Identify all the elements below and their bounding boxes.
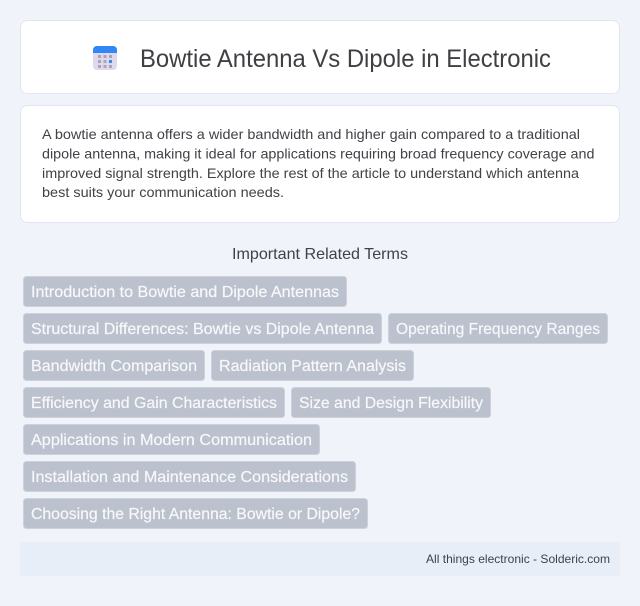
tag: radiation pattern: Radiation Pattern Analysis [219,358,406,375]
title: Bowtie Antenna Vs Dipole in Electronic [140,45,551,73]
text block: description: dipole antenna, making it ideal for applications requiring broad frequency coverage and [42,146,594,162]
tag: introduction: Introduction to Bowtie and Dipole Antennas [31,284,339,301]
text block: description: best suits your communication needs. [42,184,284,200]
tag: applications [24,424,320,454]
tag: bandwidth: Bandwidth Comparison [31,358,197,375]
tag: operating frequency [388,314,608,344]
tag: size and design [292,388,490,418]
tag: structural differences: Structural Differences: Bowtie vs Dipole Antenna [31,321,374,338]
tag: choosing: Choosing the Right Antenna: Bowtie or Dipole? [31,506,360,523]
tag: efficiency and gain: Efficiency and Gain Characteristics [31,395,277,412]
tag list: related terms [24,276,608,528]
footer [20,542,620,576]
text block: description [42,126,594,200]
panel: description [20,106,620,222]
text block: description: improved signal strength. Explore the rest of the article to understand which antenna [42,165,579,181]
tag: size and design: Size and Design Flexibility [299,395,483,412]
tag: radiation pattern [212,350,414,380]
tag: applications: Applications in Modern Communication [31,432,312,449]
tag: installation: Installation and Maintenance Considerations [31,469,348,486]
tag: structural differences [24,314,382,344]
tag: efficiency and gain [24,388,284,418]
panel: title header [20,20,620,94]
footer text: All things electronic - Solderic.com [426,552,610,566]
icon: calendar [93,46,117,70]
heading: important related terms: Important Related Terms [232,246,408,263]
tag: bandwidth [24,350,204,380]
tag: introduction [24,276,346,306]
text block: description: A bowtie antenna offers a wider bandwidth and higher gain compared to a traditional [42,126,580,142]
tag: choosing [24,498,368,528]
tag: installation [24,462,356,492]
tag: operating frequency: Operating Frequency Ranges [396,321,600,338]
